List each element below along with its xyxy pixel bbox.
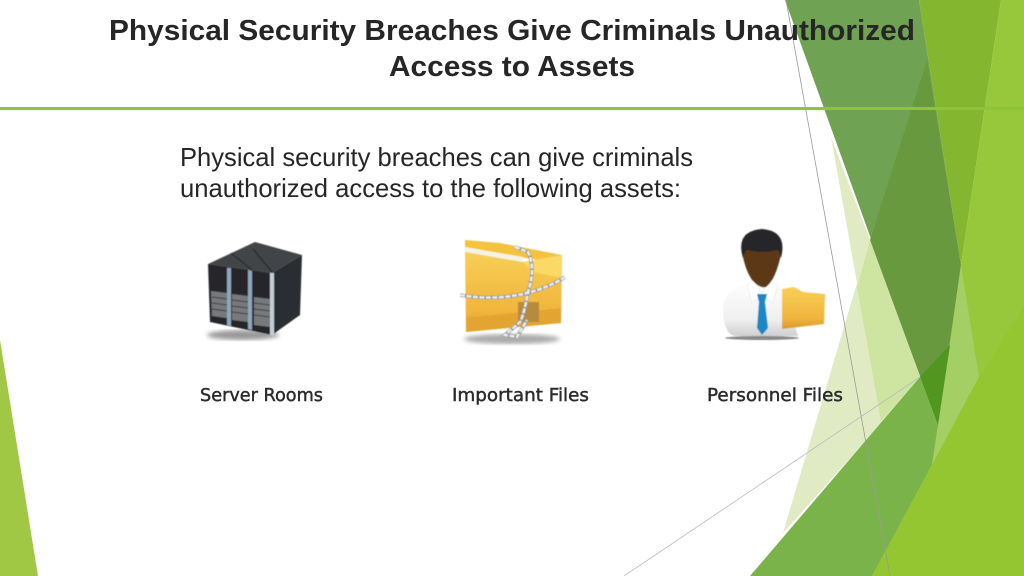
title xyxy=(109,15,915,83)
header rule xyxy=(0,107,1024,110)
thin grey line: steep diagonal xyxy=(786,0,890,576)
intro text: unauthorized access to the following assets: xyxy=(180,175,681,203)
label: Important Files: Important Files xyxy=(452,385,589,406)
label: Personnel Files: Personnel Files xyxy=(707,385,843,406)
title: Access to Assets xyxy=(389,51,635,83)
thin grey line: shallow diagonal xyxy=(624,377,920,576)
intro text: Physical security breaches can give criminals xyxy=(180,144,693,172)
label: Server Rooms: Server Rooms xyxy=(200,385,323,406)
title: Physical Security Breaches Give Criminals Unauthorized xyxy=(109,15,915,47)
icon: chained folder xyxy=(460,240,565,344)
background: left green triangle xyxy=(0,340,38,576)
icon: person with folder xyxy=(723,229,825,340)
icon: server racks xyxy=(207,242,302,340)
background: right green facets xyxy=(750,0,1024,576)
intro text xyxy=(180,144,693,203)
